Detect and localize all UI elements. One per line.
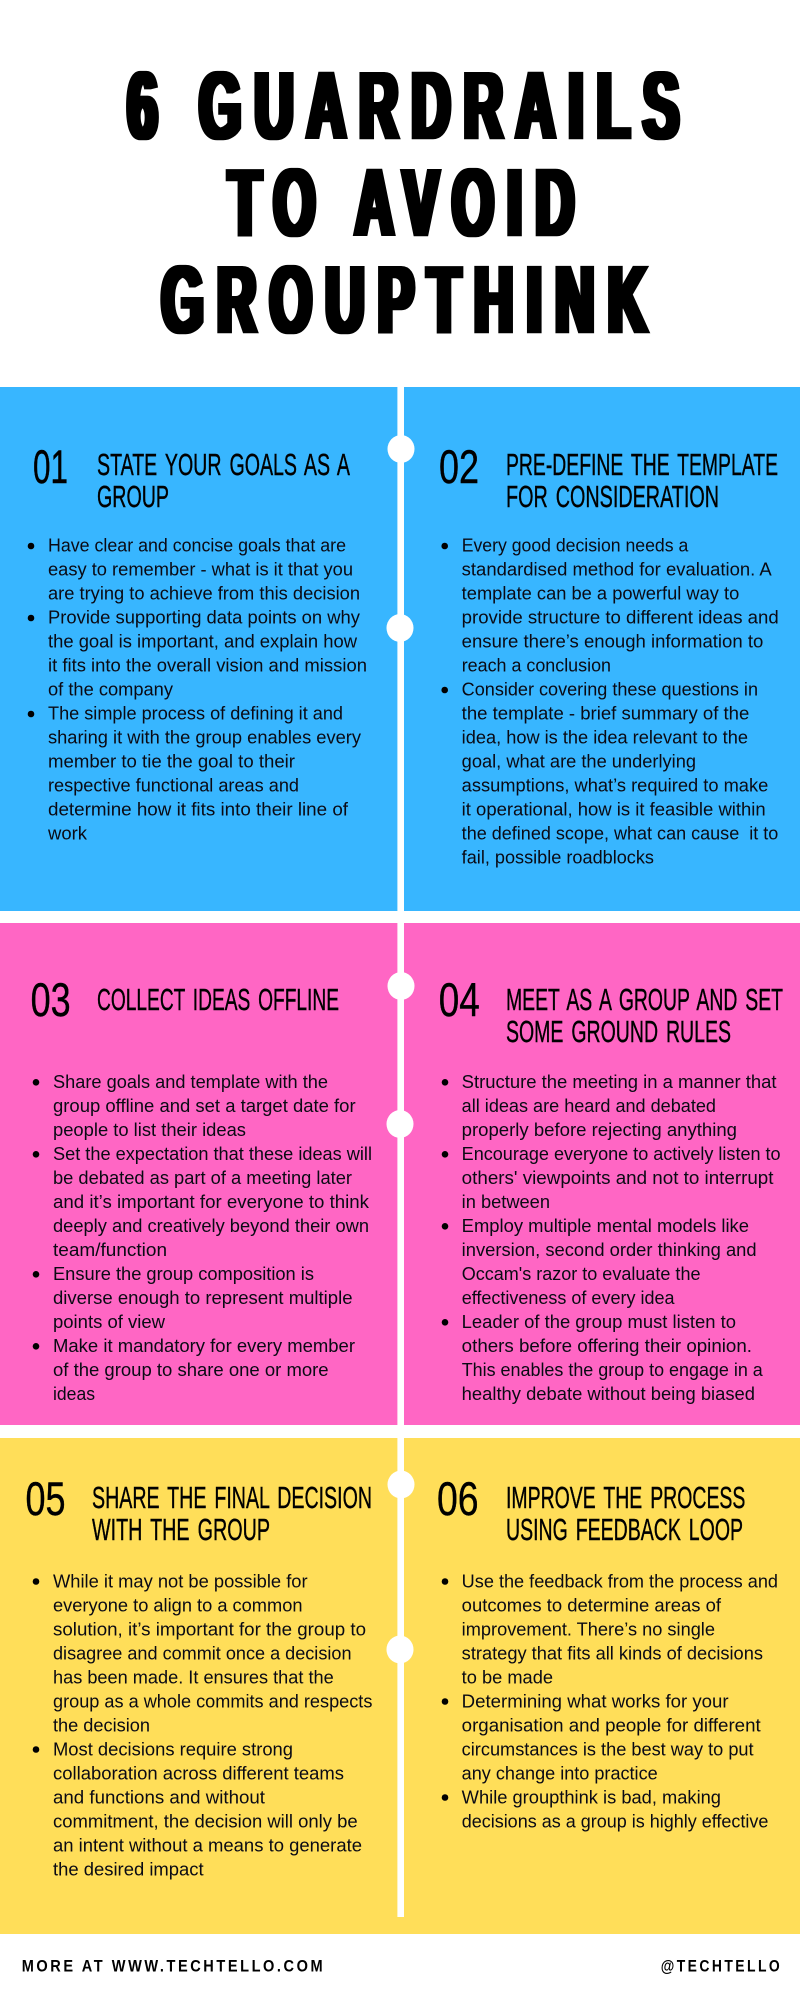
heading 01: STATE YOUR GOALS AS A: [97, 447, 350, 482]
body text 06: decisions as a group is highly effective: [462, 1812, 768, 1832]
heading 05: [92, 1480, 372, 1547]
body text 01: work: [47, 824, 88, 844]
body text 05: has been made. It ensures that the: [53, 1668, 334, 1688]
body text 04: in between: [462, 1192, 550, 1212]
body text 01: Provide supporting data points on why: [48, 608, 360, 628]
body text 04: others' viewpoints and not to interrupt: [462, 1168, 774, 1188]
panel: 06 improve the process: [400, 1438, 800, 1934]
body text 04: This enables the group to engage in a: [462, 1360, 764, 1380]
body text 01: of the company: [48, 680, 173, 700]
body text 01: the goal is important, and explain how: [48, 632, 358, 652]
body text 01: determine how it fits into their line of: [48, 800, 349, 820]
body text 02: the template - brief summary of the: [462, 704, 749, 724]
body text 03: group offline and set a target date for: [53, 1096, 356, 1116]
heading 03: COLLECT IDEAS OFFLINE: [97, 982, 339, 1017]
body text 01: sharing it with the group enables every: [48, 728, 361, 748]
title: [128, 52, 692, 354]
body text 04: healthy debate without being biased: [462, 1384, 755, 1404]
heading 05: SHARE THE FINAL DECISION: [92, 1480, 372, 1515]
body text 06: organisation and people for different: [462, 1716, 761, 1736]
heading 06: [506, 1480, 745, 1547]
body text 05: collaboration across different teams: [53, 1764, 344, 1784]
body text 01: easy to remember - what is it that you: [48, 560, 353, 580]
body text 06: Use the feedback from the process and: [462, 1572, 778, 1592]
body text 06: any change into practice: [462, 1764, 658, 1784]
body text 03: Ensure the group composition is: [53, 1264, 314, 1284]
heading 02: [506, 447, 778, 514]
body text 05: [33, 1572, 372, 1880]
body text 04: Leader of the group must listen to: [462, 1312, 736, 1332]
body text 02: Consider covering these questions in: [462, 680, 758, 700]
body text 04: Structure the meeting in a manner that: [462, 1072, 776, 1092]
heading 04: [506, 982, 783, 1049]
body text 05: everyone to align to a common: [53, 1596, 302, 1616]
body text 01: Have clear and concise goals that are: [48, 536, 346, 556]
body text 02: goal, what are the underlying: [462, 752, 696, 772]
body text 04: [442, 1072, 781, 1404]
body text 05: While it may not be possible for: [53, 1572, 308, 1592]
body text 03: diverse enough to represent multiple: [53, 1288, 352, 1308]
body text 03: deeply and creatively beyond their own: [53, 1216, 369, 1236]
body text 03: people to list their ideas: [53, 1120, 246, 1140]
body text 02: fail, possible roadblocks: [462, 848, 654, 868]
body text 01: respective functional areas and: [48, 776, 299, 796]
number 04: 04: [439, 973, 480, 1026]
body text 01: are trying to achieve from this decision: [48, 584, 360, 604]
body text 06: While groupthink is bad, making: [462, 1788, 721, 1808]
body text 06: outcomes to determine areas of: [462, 1596, 722, 1616]
body text 06: [442, 1572, 778, 1832]
body text 02: [441, 536, 779, 868]
body text 05: and functions and without: [53, 1788, 265, 1808]
body text 01: it fits into the overall vision and mission: [48, 656, 367, 676]
body text 05: the decision: [53, 1716, 150, 1736]
body text 02: assumptions, what’s required to make: [462, 776, 768, 796]
body text 05: disagree and commit once a decision: [53, 1644, 351, 1664]
body text 04: properly before rejecting anything: [462, 1120, 737, 1140]
body text 01: [28, 536, 367, 844]
body text 02: reach a conclusion: [462, 656, 611, 676]
body text 01: The simple process of defining it and: [48, 704, 343, 724]
body text 06: improvement. There’s no single: [462, 1620, 715, 1640]
body text 06: circumstances is the best way to put: [462, 1740, 754, 1760]
body text 05: an intent without a means to generate: [53, 1836, 362, 1856]
body text 03: [33, 1072, 372, 1404]
central divider timeline with dots: [386, 387, 414, 1917]
body text 02: provide structure to different ideas and: [462, 608, 779, 628]
number 05: 05: [26, 1472, 66, 1525]
body text 03: points of view: [53, 1312, 166, 1332]
heading 01: [97, 447, 350, 514]
body text 02: template can be a powerful way to: [462, 584, 739, 604]
number 06: 06: [437, 1472, 479, 1525]
heading 01: GROUP: [97, 479, 169, 514]
body text 03: be debated as part of a meeting later: [53, 1168, 352, 1188]
footer: website: MORE AT WWW.TECHTELLO.COM: [22, 1957, 325, 1976]
number 03: 03: [31, 973, 71, 1026]
body text 02: it operational, how is it feasible within: [462, 800, 766, 820]
body text 02: ensure there’s enough information to: [462, 632, 763, 652]
body text 03: of the group to share one or more: [53, 1360, 329, 1380]
body text 05: Most decisions require strong: [53, 1740, 293, 1760]
body text 04: inversion, second order thinking and: [462, 1240, 757, 1260]
body text 03: ideas: [53, 1384, 95, 1404]
body text 02: the defined scope, what can cause it to: [462, 824, 778, 844]
body text 06: strategy that fits all kinds of decisions: [462, 1644, 763, 1664]
panel: 03 collect ideas offline: [0, 923, 400, 1425]
body text 04: Encourage everyone to actively listen to: [462, 1144, 781, 1164]
heading 05: WITH THE GROUP: [92, 1512, 270, 1547]
panel: 05 share the final decision: [0, 1438, 400, 1934]
body text 03: Set the expectation that these ideas will: [53, 1144, 372, 1164]
panel: 02 pre-define the template: [400, 387, 800, 911]
number 02: 02: [439, 440, 479, 493]
body text 02: idea, how is the idea relevant to the: [462, 728, 748, 748]
body text 01: member to tie the goal to their: [48, 752, 295, 772]
number 01: 01: [33, 440, 68, 493]
body text 05: solution, it’s important for the group to: [53, 1620, 366, 1640]
body text 06: Determining what works for your: [462, 1692, 729, 1712]
body text 04: all ideas are heard and debated: [462, 1096, 716, 1116]
body text 05: the desired impact: [53, 1860, 204, 1880]
body text 03: team/function: [53, 1240, 167, 1260]
body text 03: and it’s important for everyone to think: [53, 1192, 370, 1212]
body text 02: standardised method for evaluation. A: [462, 560, 772, 580]
body text 04: others before offering their opinion.: [462, 1336, 752, 1356]
panel: 01 state your goals: [0, 387, 400, 911]
body text 05: commitment, the decision will only be: [53, 1812, 358, 1832]
body text 04: Employ multiple mental models like: [462, 1216, 749, 1236]
body text 04: Occam's razor to evaluate the: [462, 1264, 700, 1284]
body text 06: to be made: [462, 1668, 553, 1688]
body text 03: Share goals and template with the: [53, 1072, 328, 1092]
body text 05: group as a whole commits and respects: [53, 1692, 372, 1712]
body text 03: Make it mandatory for every member: [53, 1336, 355, 1356]
body text 02: Every good decision needs a: [462, 536, 689, 556]
panel: 04 meet as a group: [400, 923, 800, 1425]
body text 04: effectiveness of every idea: [462, 1288, 675, 1308]
